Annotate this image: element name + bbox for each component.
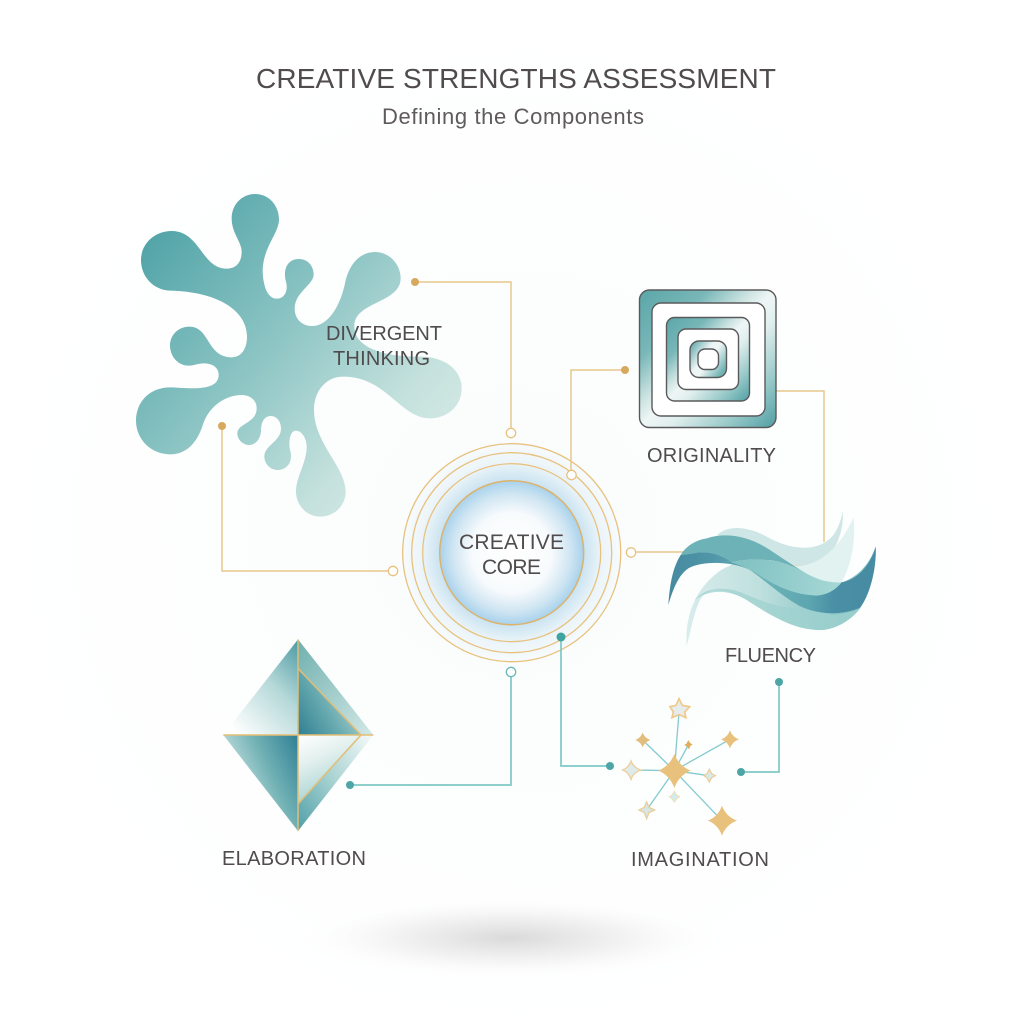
icon: core rings: [403, 444, 621, 662]
icon: star burst: [623, 699, 739, 836]
label: creative core: CREATIVE: [459, 531, 564, 554]
panel: elaboration: [222, 639, 373, 870]
title: CREATIVE STRENGTHS ASSESSMENT: [256, 63, 776, 94]
gold and teal connector lines: [222, 282, 824, 785]
icon: splat: [136, 194, 462, 517]
label: imagination: IMAGINATION: [631, 849, 769, 871]
panel: imagination: [623, 699, 769, 871]
icon: diamond: [223, 639, 373, 831]
label: fluency: FLUENCY: [725, 645, 816, 667]
panel: originality: [640, 290, 776, 467]
label: divergent thinking: DIVERGENT: [326, 323, 442, 345]
panel: fluency: [668, 511, 876, 667]
connector nodes: [218, 278, 783, 789]
panel: divergent thinking: [136, 194, 462, 517]
label: divergent thinking: THINKING: [333, 348, 430, 370]
floor shadow: [290, 896, 730, 980]
label: creative core: [459, 531, 564, 579]
label: creative core: CORE: [482, 556, 541, 579]
label: divergent thinking: [326, 323, 442, 370]
subtitle: Defining the Components: [382, 104, 644, 129]
icon: waves: [668, 511, 876, 646]
icon: concentric squares: [640, 290, 776, 428]
label: originality: ORIGINALITY: [647, 445, 776, 467]
label: elaboration: ELABORATION: [222, 848, 366, 870]
